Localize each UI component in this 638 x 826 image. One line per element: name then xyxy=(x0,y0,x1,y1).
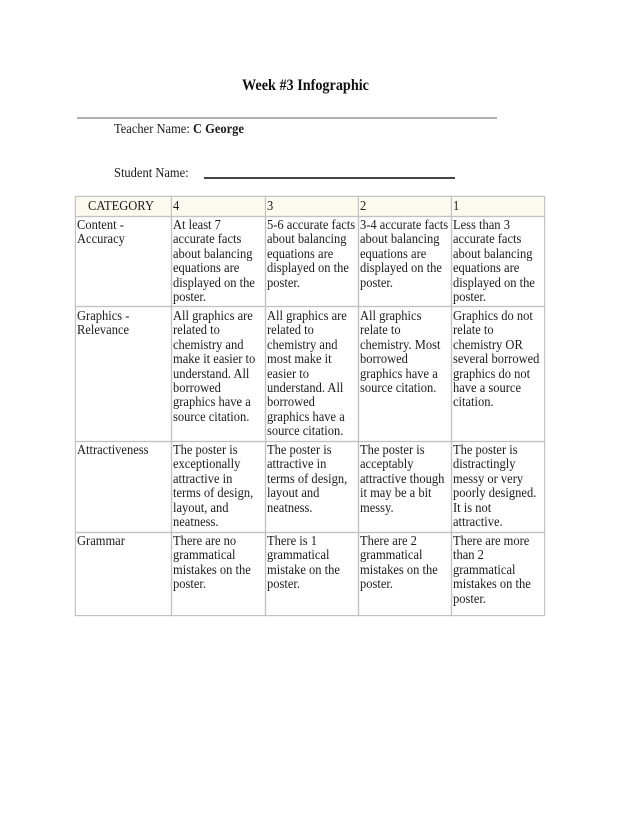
row 4 score 3 xyxy=(265,532,359,616)
title: Week #3 Infographic xyxy=(242,77,369,94)
row 4 score 3: There is 1 grammatical mistake on the poster. xyxy=(267,533,340,591)
row 2 score 2 xyxy=(358,306,452,442)
row 2 score 2: All graphics relate to chemistry. Most borrowed graphics have a source citation. xyxy=(360,308,440,395)
header cell: 2: 2 xyxy=(360,198,366,213)
row 1 score 4: At least 7 accurate facts about balancing equations are displayed on the poster. xyxy=(173,217,255,304)
row 1 category: Content - Accuracy xyxy=(77,217,125,246)
row 3 score 3 xyxy=(265,441,359,533)
row 1 score 2: 3-4 accurate facts about balancing equations are displayed on the poster. xyxy=(360,217,448,290)
header cell: category: CATEGORY xyxy=(88,198,154,213)
row 3 category xyxy=(75,441,172,533)
row 1 score 3: 5-6 accurate facts about balancing equations are displayed on the poster. xyxy=(267,217,355,290)
row 3 score 3: The poster is attractive in terms of design, layout and neatness. xyxy=(267,442,347,515)
header rule xyxy=(77,117,497,119)
row 4 score 1: There are more than 2 grammatical mistakes on the poster. xyxy=(453,533,531,606)
row 2 score 1: Graphics do not relate to chemistry OR several borrowed graphics do not have a source citation. xyxy=(453,308,539,409)
row 4 score 4 xyxy=(171,532,266,616)
row 4 score 4: There are no grammatical mistakes on the poster. xyxy=(173,533,251,591)
row 3 category: Attractiveness xyxy=(77,442,149,457)
row 2 score 1 xyxy=(451,306,545,442)
row 1 category xyxy=(75,216,172,307)
student name: Student Name: xyxy=(114,165,189,180)
row 3 score 2: The poster is acceptably attractive though it may be a bit messy. xyxy=(360,442,444,515)
row 2 score 4: All graphics are related to chemistry and make it easier to understand. All borrowed graphics have a source citation. xyxy=(173,308,255,424)
rubric table xyxy=(74,196,546,616)
row 2 category xyxy=(75,306,172,442)
teacher name: Teacher Name: C George xyxy=(114,121,244,136)
row 2 category: Graphics - Relevance xyxy=(77,308,129,337)
header cell: 4 xyxy=(171,196,266,217)
header cell: 4: 4 xyxy=(173,198,179,213)
header cell: 3: 3 xyxy=(267,198,273,213)
header cell: 3 xyxy=(265,196,359,217)
row 3 score 4: The poster is exceptionally attractive in terms of design, layout, and neatness. xyxy=(173,442,253,529)
row 1 score 1: Less than 3 accurate facts about balancing equations are displayed on the poster. xyxy=(453,217,535,304)
row 4 score 2: There are 2 grammatical mistakes on the poster. xyxy=(360,533,438,591)
header cell: category xyxy=(75,196,172,217)
row 4 category: Grammar xyxy=(77,533,125,548)
row 2 score 3: All graphics are related to chemistry and most make it easier to understand. All borrowed graphics have a source citation. xyxy=(267,308,347,438)
header cell: 1: 1 xyxy=(453,198,459,213)
row 4 score 2 xyxy=(358,532,452,616)
student name line xyxy=(204,177,455,179)
header cell: 2 xyxy=(358,196,452,217)
row 3 score 1: The poster is distractingly messy or very poorly designed. It is not attractive. xyxy=(453,442,536,529)
row 4 category xyxy=(75,532,172,616)
header cell: 1 xyxy=(451,196,545,217)
